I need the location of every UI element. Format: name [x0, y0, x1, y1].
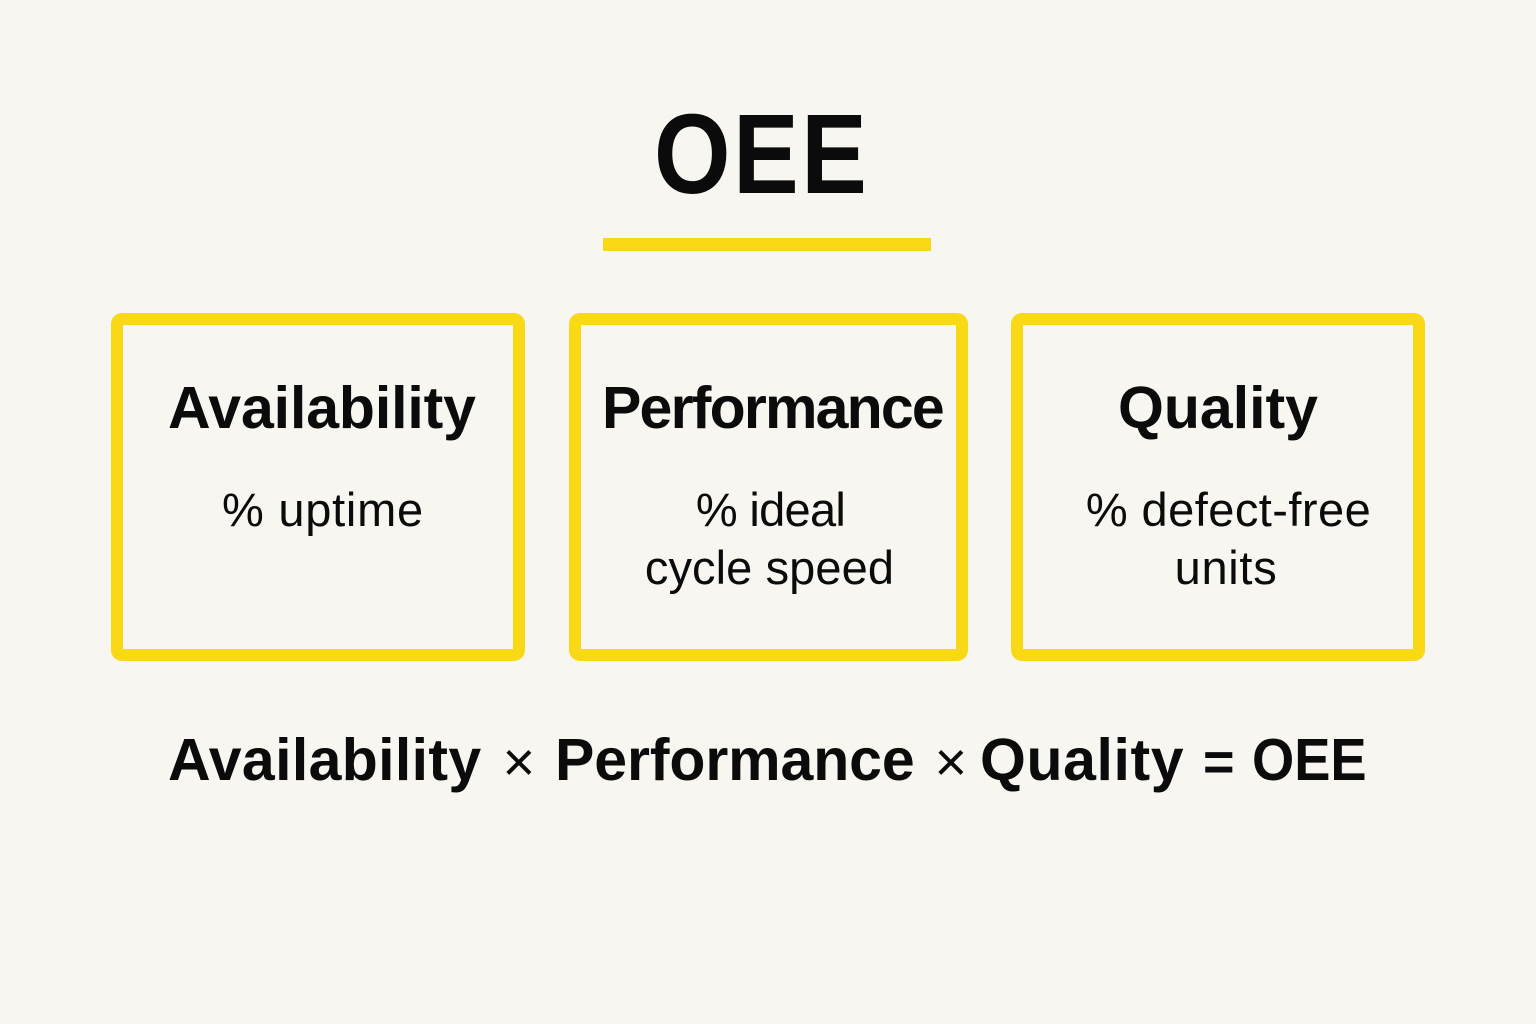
quality description	[1086, 483, 1371, 594]
panel: quality	[1011, 313, 1425, 661]
equals sign: =	[1203, 732, 1235, 792]
panel: availability	[111, 313, 525, 661]
availability description: % uptime	[222, 483, 424, 536]
formula term: quality: Quality	[980, 727, 1184, 793]
quality heading: Quality	[1118, 375, 1318, 441]
availability heading: Availability	[168, 375, 476, 441]
title underline	[603, 238, 931, 251]
panel: performance	[569, 313, 968, 661]
performance description: cycle speed	[645, 541, 894, 594]
formula term: availability: Availability	[168, 727, 482, 793]
formula result: OEE	[1252, 727, 1367, 793]
performance description	[645, 483, 894, 594]
multiply sign: ×	[934, 730, 967, 793]
performance heading: Performance	[602, 375, 943, 441]
multiply sign: ×	[502, 730, 535, 793]
title: OEE	[654, 91, 869, 217]
formula	[168, 727, 1367, 793]
formula term: performance: Performance	[555, 727, 915, 793]
quality description: % defect-free	[1086, 483, 1371, 536]
performance description: % ideal	[696, 483, 845, 536]
quality description: units	[1175, 541, 1277, 594]
